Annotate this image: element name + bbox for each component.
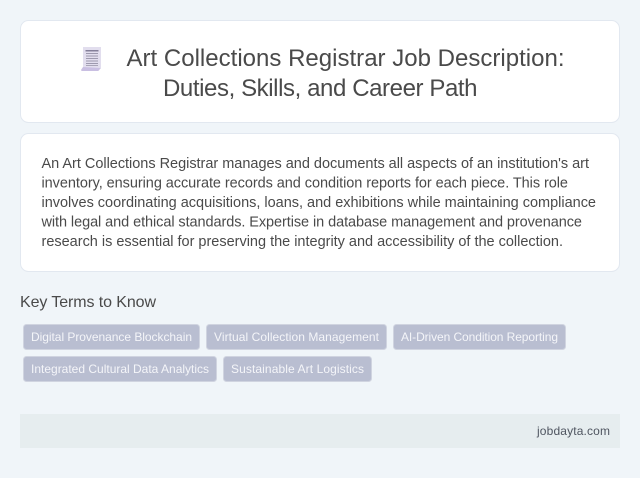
description text: inventory, ensuring accurate records and condition reports for each piece. This role — [42, 176, 568, 192]
tag: virtual collection management: Virtual Collection Management — [214, 330, 380, 344]
title — [126, 45, 564, 102]
footer bar — [20, 414, 620, 448]
tag: sustainable art logistics: Sustainable Art Logistics — [231, 362, 364, 376]
tag: digital provenance blockchain: Digital Provenance Blockchain — [31, 330, 192, 344]
description text: An Art Collections Registrar manages and documents all aspects of an institution's art — [42, 156, 589, 172]
title: Art Collections Registrar Job Description: — [126, 45, 564, 72]
tag list — [24, 324, 566, 382]
tag: sustainable art logistics — [224, 356, 372, 382]
tag: integrated cultural data analytics: Integrated Cultural Data Analytics — [31, 362, 209, 376]
panel: title card — [20, 20, 620, 122]
description text: with legal and ethical standards. Expertise in database management and provenance — [40, 214, 582, 230]
description text — [40, 156, 596, 250]
title: Duties, Skills, and Career Path — [163, 75, 478, 102]
description text: involves coordinating acquisitions, loans, and exhibitions while maintaining compliance — [42, 195, 596, 211]
panel: description card — [20, 134, 620, 272]
tag: ai-driven condition reporting — [394, 324, 566, 350]
footer source text: jobdayta.com — [536, 424, 610, 438]
tag: digital provenance blockchain — [24, 324, 200, 350]
tag: virtual collection management — [206, 324, 386, 350]
heading: key terms: Key Terms to Know — [20, 294, 156, 311]
tag: ai-driven condition reporting: AI-Driven Condition Reporting — [401, 330, 558, 344]
tag: integrated cultural data analytics — [24, 356, 216, 382]
icon: document scroll — [81, 47, 101, 71]
description text: research is essential for preserving the integrity and accessibility of the collection. — [42, 234, 563, 250]
